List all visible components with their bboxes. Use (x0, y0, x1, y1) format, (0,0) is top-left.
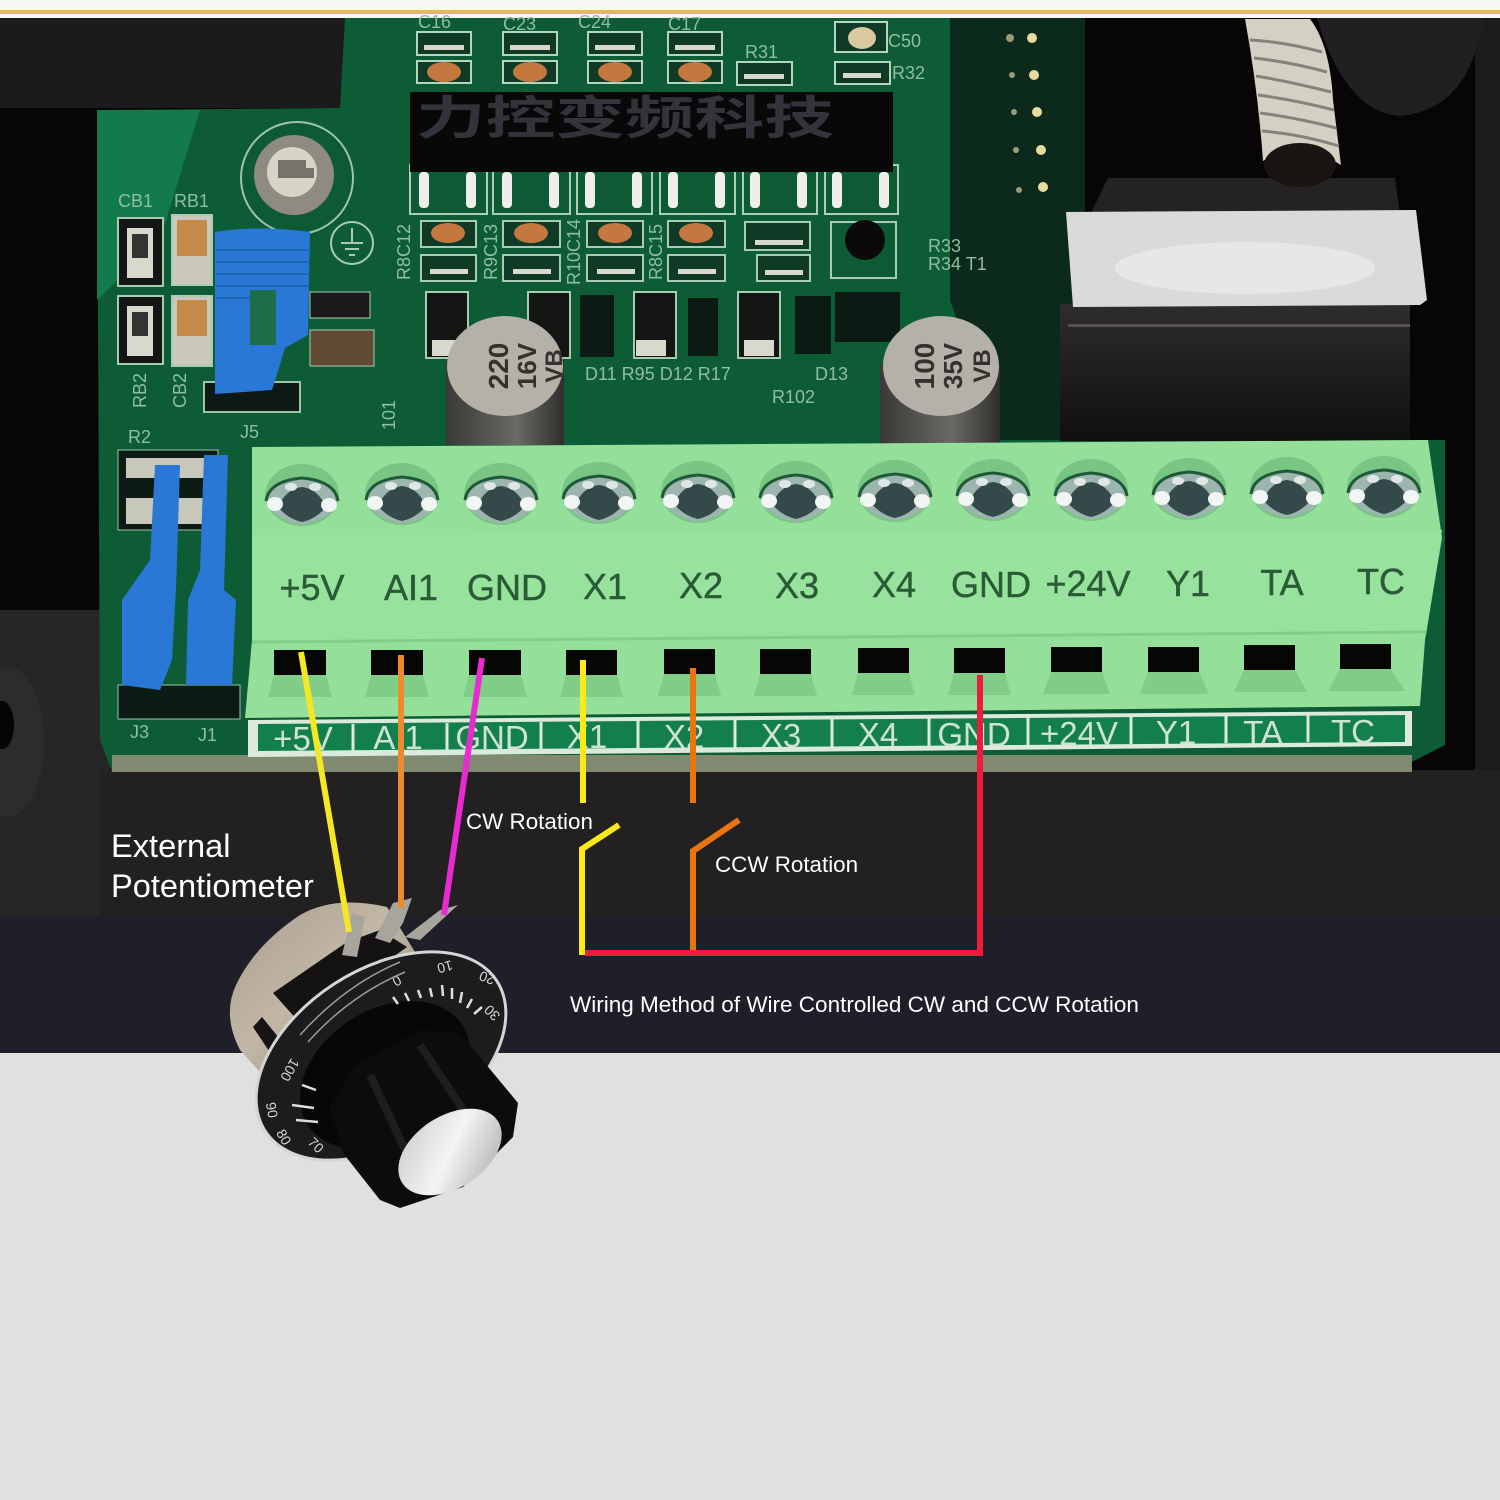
scale plate: 10 (435, 957, 455, 977)
terminal block (245, 440, 1442, 718)
label: external potentiometer: Potentiometer (111, 867, 314, 904)
silkscreen labels: C23 (503, 14, 536, 34)
jumpers J3 and J1 (118, 450, 240, 719)
silkscreen labels: R102 (772, 387, 815, 407)
PCB printed label strip: TC (1331, 713, 1375, 750)
scale plate: 70 (305, 1134, 327, 1156)
PCB printed label strip: AI1 (373, 719, 423, 756)
silkscreen labels: R10C14 (564, 219, 584, 285)
potentiometer (218, 898, 544, 1213)
silkscreen labels: D13 (815, 364, 848, 384)
silkscreen labels: J5 (240, 422, 259, 442)
PCB printed label strip: Y1 (1156, 714, 1196, 751)
top SMD components (417, 22, 890, 85)
terminal labels: AI1 (384, 567, 438, 608)
capacitor 100 35V: 100 (909, 343, 940, 389)
terminal labels: Y1 (1166, 563, 1210, 604)
header pins (1006, 33, 1048, 193)
silkscreen labels: R2 (128, 427, 151, 447)
capacitor 100 35V: 35V (938, 342, 968, 389)
silkscreen labels: R34 T1 (928, 254, 987, 274)
blue jumper J5 (204, 228, 310, 412)
ground symbol (331, 222, 373, 264)
common GND wire (585, 675, 980, 953)
yellow potentiometer wire (301, 652, 349, 932)
terminal labels: +5V (279, 567, 345, 608)
PCB printed label strip: GND (937, 716, 1011, 753)
capacitor 220 16V (446, 316, 568, 445)
terminal labels: TC (1357, 561, 1405, 602)
scale plate: 0 (389, 972, 404, 990)
label: external potentiometer: External (111, 827, 231, 864)
top border (0, 0, 1500, 18)
PCB printed label strip: GND (455, 719, 529, 756)
PCB printed label strip: X2 (664, 718, 704, 755)
dark band (0, 917, 1500, 1053)
silkscreen labels: C17 (668, 14, 701, 34)
silkscreen labels: R33 (928, 236, 961, 256)
capacitor 220 16V: 220 (483, 343, 514, 389)
label: CCW rotation: CCW Rotation (715, 852, 858, 877)
corner knob shadow (1317, 18, 1483, 116)
mid SMD array (421, 220, 900, 358)
photo background (0, 18, 1500, 918)
silkscreen labels: C16 (418, 12, 451, 32)
terminal screws (265, 456, 1421, 526)
silkscreen labels: CB2 (170, 373, 190, 408)
terminal wire slots (268, 644, 1405, 697)
silkscreen labels: J1 (198, 725, 217, 745)
CCW switch wire (693, 668, 739, 955)
capacitor 220 16V: 16V (512, 342, 542, 389)
terminal labels: GND (467, 567, 547, 608)
silkscreen labels: RB1 (174, 191, 209, 211)
scale plate: 80 (273, 1126, 295, 1148)
scale plate: 30 (481, 1002, 503, 1024)
label: CW rotation: CW Rotation (466, 809, 593, 834)
magenta potentiometer wire (444, 658, 482, 915)
silkscreen labels: 101 (379, 400, 399, 430)
PCB printed label strip: X3 (761, 717, 801, 754)
IC chip array (410, 92, 898, 214)
terminal labels: X4 (872, 564, 916, 605)
capacitor 100 35V (880, 316, 1000, 445)
PCB printed label strip (248, 711, 1412, 757)
mounting screw (241, 122, 353, 234)
scale plate: 20 (477, 968, 497, 988)
silkscreen labels: CB1 (118, 191, 153, 211)
terminal labels: GND (951, 564, 1031, 605)
silkscreen labels (118, 12, 987, 745)
left SMD components (118, 215, 374, 366)
terminal labels: X2 (679, 565, 723, 606)
scale plate (218, 909, 544, 1203)
potentiometer terminals (342, 898, 458, 957)
terminal labels (279, 561, 1405, 608)
PCB printed label strip: TA (1243, 714, 1283, 751)
IC chip array: 力控变频科技 (416, 92, 834, 144)
silkscreen labels: R32 (892, 63, 925, 83)
terminal labels: +24V (1045, 563, 1131, 604)
terminal labels: X3 (775, 565, 819, 606)
silkscreen labels: C50 (888, 31, 921, 51)
orange potentiometer wire (398, 655, 404, 908)
PCB printed label strip: +5V (273, 720, 333, 757)
cable spring (1245, 19, 1341, 187)
scale plate: 100 (277, 1056, 303, 1084)
caption: Wiring Method of Wire Controlled CW and CCW Rotation (570, 992, 1139, 1017)
terminal labels: X1 (583, 566, 627, 607)
silkscreen labels: RB2 (130, 373, 150, 408)
power module (1060, 18, 1483, 441)
circuit board (97, 18, 1445, 772)
CW switch wire (582, 660, 619, 955)
terminal labels: TA (1260, 562, 1304, 603)
scale plate: 90 (263, 1101, 281, 1119)
silkscreen labels: R8C12 (394, 224, 414, 280)
capacitor 100 35V: VB (969, 349, 996, 383)
silkscreen labels: R8C15 (646, 224, 666, 280)
silkscreen labels: R31 (745, 42, 778, 62)
silkscreen labels: R9C13 (481, 224, 501, 280)
silkscreen labels: C24 (578, 12, 611, 32)
potentiometer body (230, 902, 420, 1080)
silkscreen labels: J3 (130, 722, 149, 742)
PCB printed label strip: X1 (567, 718, 607, 755)
label: external potentiometer (111, 827, 314, 904)
capacitor 220 16V: VB (541, 349, 568, 383)
PCB printed label strip: +24V (1040, 715, 1118, 752)
silkscreen labels: D11 R95 D12 R17 (585, 364, 731, 384)
knob (330, 1030, 518, 1213)
PCB printed label strip: X4 (858, 716, 898, 753)
